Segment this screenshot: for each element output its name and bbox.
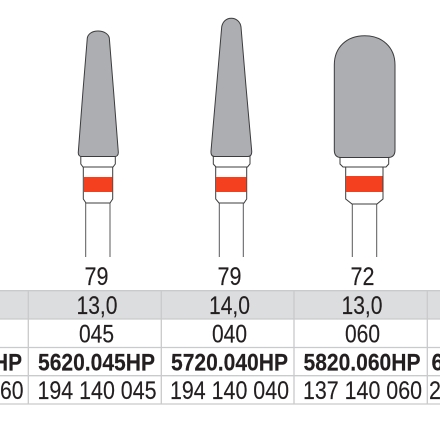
bur 1: tapered round-end diamond — [78, 31, 118, 257]
bur 3: wide cylinder round-end diamond — [334, 36, 395, 257]
row: working length values — [76, 292, 382, 320]
row: working length values: 13,0 — [342, 292, 382, 320]
row: order numbers: 194 140 045 — [38, 377, 156, 405]
row band: gray length row — [0, 291, 440, 319]
row: diameter values: 040 — [212, 320, 247, 348]
row: diameter values — [79, 320, 380, 348]
row: total length values: 79 — [84, 263, 108, 291]
row: total length values: 72 — [350, 263, 374, 291]
row: diameter values: 045 — [79, 320, 114, 348]
row: product codes: 5720.040HP — [171, 350, 288, 377]
row: product codes: 5620.045HP — [38, 350, 155, 377]
row: order numbers — [0, 377, 440, 405]
table grid lines — [0, 291, 440, 404]
row: working length values: 14,0 — [209, 292, 250, 320]
row: total length values — [84, 263, 374, 291]
row: product codes — [0, 350, 440, 377]
row: order numbers: 194 140 040 — [170, 377, 289, 405]
row: diameter values: 060 — [345, 320, 380, 348]
row: product codes: 5820.060HP — [304, 350, 420, 377]
row: order numbers: 60 — [0, 377, 24, 405]
row: order numbers: 137 140 060 — [303, 377, 422, 405]
data table — [0, 263, 440, 405]
row: working length values: 13,0 — [76, 292, 118, 320]
bur 2: long tapered round-end diamond — [211, 18, 252, 257]
row: total length values: 79 — [218, 263, 242, 291]
